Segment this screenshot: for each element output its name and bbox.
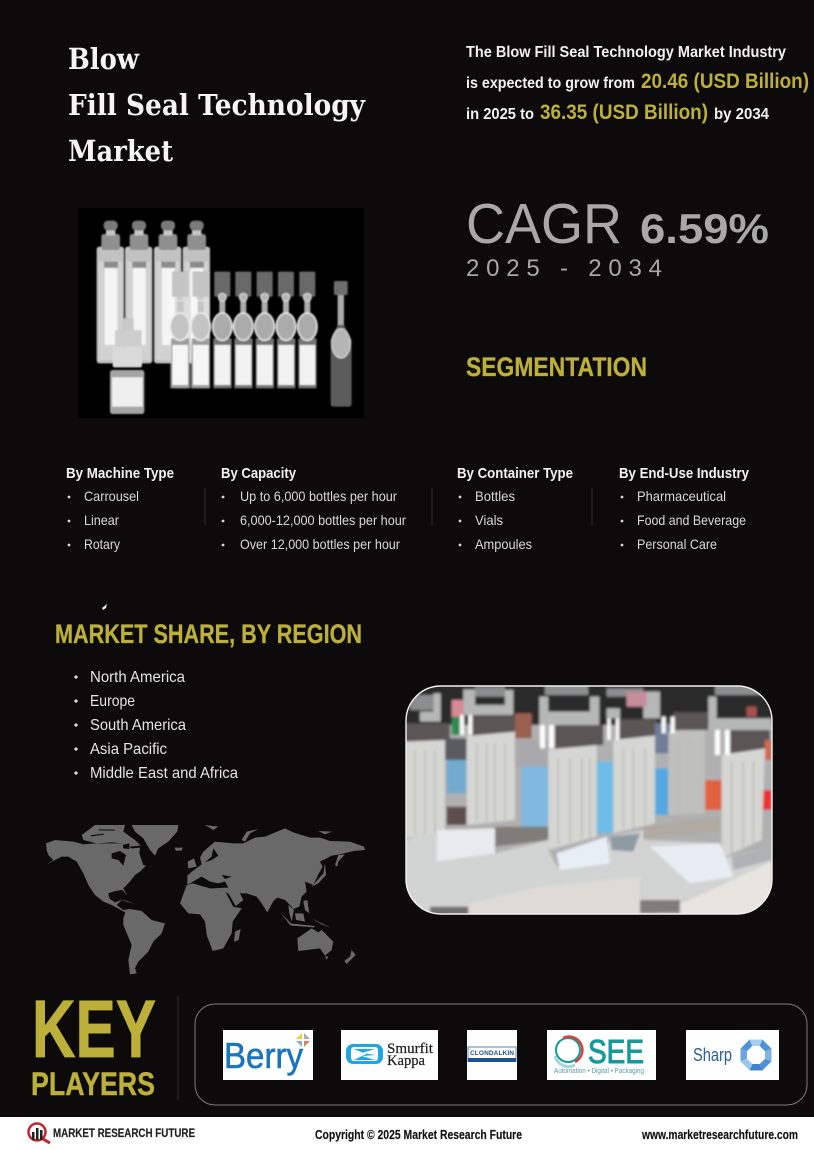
segment: by container type: Vials xyxy=(475,512,503,528)
logo: Smurfit Kappa xyxy=(341,1030,438,1080)
region list: Europe xyxy=(90,693,135,710)
segment: by capacity: Up to 6,000 bottles per hour xyxy=(240,488,397,504)
title xyxy=(68,42,366,168)
segment: by machine type: Rotary xyxy=(84,536,120,552)
headline market size statement: by 2034 xyxy=(714,106,769,123)
photo: filling machine line xyxy=(400,680,780,920)
headline market size statement: The Blow Fill Seal Technology Market Industry xyxy=(466,44,786,61)
logo: SEE: SEE xyxy=(588,1033,644,1070)
product image: blow fill seal vials xyxy=(78,208,364,418)
headline market size statement: in 2025 to xyxy=(466,106,534,123)
headline market size statement xyxy=(466,44,809,124)
heading: key players: PLAYERS xyxy=(31,1066,155,1102)
region list: Asia Pacific xyxy=(90,741,167,758)
logo: SEE: Automation • Digital • Packaging xyxy=(554,1068,644,1075)
footer logo xyxy=(28,1124,195,1143)
region list xyxy=(74,669,238,782)
logo: Berry: Berry xyxy=(224,1035,303,1076)
region list: South America xyxy=(90,717,186,734)
segment: by machine type: Linear xyxy=(84,512,119,528)
title: Fill Seal Technology xyxy=(68,88,366,122)
segment: by container type: Bottles xyxy=(475,488,515,504)
segment: by capacity: By Capacity xyxy=(221,465,297,482)
footer bar xyxy=(0,1117,814,1150)
segment: by machine type xyxy=(66,465,174,552)
logo: Clondalkin: CLONDALKIN xyxy=(470,1050,514,1057)
region list: North America xyxy=(90,669,185,686)
logo: Smurfit Kappa: Kappa xyxy=(387,1053,425,1069)
logo: Smurfit Kappa: Smurfit xyxy=(387,1041,434,1057)
logo: SEE xyxy=(547,1030,656,1080)
segment: by end-use industry: Personal Care xyxy=(637,536,717,552)
segment: by capacity: Over 12,000 bottles per hour xyxy=(240,536,400,552)
heading: key players xyxy=(31,984,156,1102)
segment: by container type xyxy=(457,465,573,552)
headline market size statement: is expected to grow from xyxy=(466,75,635,92)
segment: by container type: By Container Type xyxy=(457,465,573,482)
copyright: Copyright © 2025 Market Research Future xyxy=(315,1128,522,1142)
segment: by end-use industry xyxy=(619,465,750,552)
logo: Sharp: Sharp xyxy=(693,1045,732,1065)
segment: by capacity xyxy=(221,465,406,552)
CAGR block: 6.59% xyxy=(640,205,769,252)
CAGR block: 2025 - 2034 xyxy=(466,255,662,282)
CAGR block: CAGR xyxy=(466,192,622,256)
world map xyxy=(46,825,365,974)
headline market size statement: 36.35 (USD Billion) xyxy=(540,101,708,124)
segment: by machine type: Carrousel xyxy=(84,488,139,504)
CAGR block xyxy=(466,192,769,282)
key players panel xyxy=(195,1004,807,1105)
segment: by capacity: 6,000-12,000 bottles per hour xyxy=(240,512,406,528)
segment: by end-use industry: Pharmaceutical xyxy=(637,488,726,504)
region list: Middle East and Africa xyxy=(90,765,238,782)
heading: key players: KEY xyxy=(32,984,156,1075)
segment: by machine type: By Machine Type xyxy=(66,465,174,482)
heading: segmentation: SEGMENTATION xyxy=(466,352,647,382)
footer logo: MARKET RESEARCH FUTURE xyxy=(53,1126,195,1140)
heading: market share by region: MARKET SHARE, BY REGION xyxy=(55,619,362,649)
logo: Clondalkin xyxy=(467,1030,517,1080)
title: Blow xyxy=(68,42,140,76)
segment: by container type: Ampoules xyxy=(475,536,532,552)
title: Market xyxy=(68,134,174,168)
segment: by end-use industry: By End-Use Industry xyxy=(619,465,750,482)
segment: by end-use industry: Food and Beverage xyxy=(637,512,746,528)
logo: Sharp xyxy=(686,1030,779,1080)
